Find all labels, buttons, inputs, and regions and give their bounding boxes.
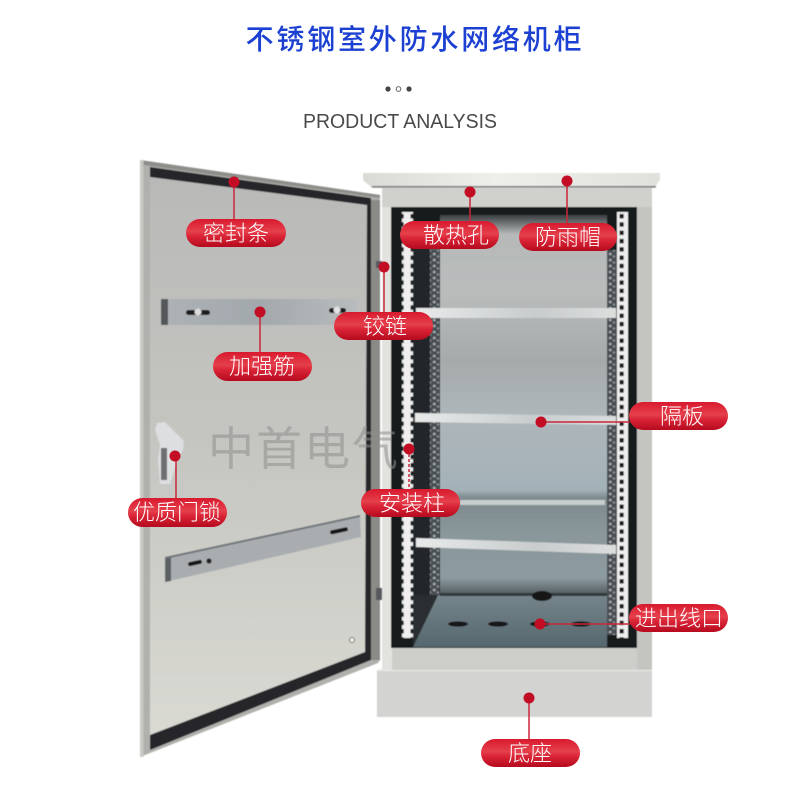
cable entry slots [448, 621, 591, 627]
lower reinforcing bar [165, 515, 361, 582]
label: 进出线口: 进出线口 [635, 606, 723, 631]
watermark: 中首电气 [208, 423, 400, 475]
label: 密封条: 密封条 [203, 221, 269, 246]
label: 底座 [481, 692, 580, 767]
label: 加强筋: 加强筋 [229, 354, 295, 379]
shelves [415, 308, 616, 554]
label: 铰链: 铰链 [363, 314, 407, 339]
cable entry back hole [532, 591, 552, 601]
left inner wall [413, 225, 440, 597]
label: 散热孔 [400, 186, 499, 249]
decorative dots [385, 86, 412, 92]
title: 不锈钢室外防水网络机柜 [246, 24, 584, 55]
label: 防雨帽: 防雨帽 [535, 225, 601, 250]
cabinet floor [413, 595, 607, 647]
label: 优质门锁 [128, 450, 227, 527]
rain cap [363, 173, 660, 207]
label: 安装柱: 安装柱 [379, 491, 445, 516]
label: 优质门锁: 优质门锁 [133, 500, 221, 525]
label: 隔板: 隔板 [660, 404, 704, 429]
label: 加强筋 [213, 306, 312, 381]
cabinet photo [140, 160, 660, 757]
label: 散热孔: 散热孔 [423, 223, 489, 248]
door screw [350, 638, 354, 642]
hinges [376, 261, 382, 600]
cabinet interior [391, 207, 637, 648]
label: 隔板 [536, 402, 728, 430]
label: 进出线口 [534, 604, 728, 632]
upper reinforcing bar [161, 299, 358, 325]
subtitle: PRODUCT ANALYSIS [303, 111, 497, 133]
cabinet base [377, 669, 652, 717]
open door [140, 160, 380, 757]
label: 铰链 [334, 262, 433, 340]
right inner wall [607, 250, 617, 635]
label: 底座: 底座 [508, 741, 552, 766]
door lock [155, 422, 184, 484]
label: 防雨帽 [519, 176, 617, 251]
back shelf [460, 500, 605, 505]
label: 安装柱 [361, 444, 460, 517]
mounting posts [402, 212, 628, 638]
label: 密封条 [186, 176, 286, 247]
cabinet body [382, 188, 652, 670]
